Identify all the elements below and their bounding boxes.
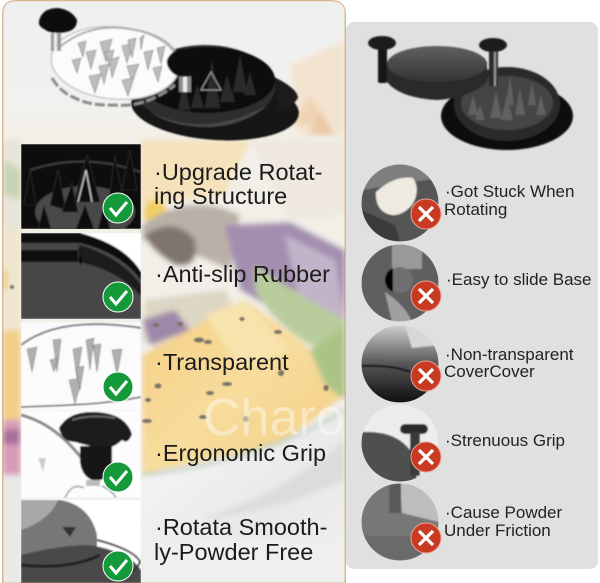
watermark: Charoo — [203, 389, 374, 447]
check badge: smooth rotation — [103, 551, 133, 581]
black base — [129, 45, 301, 146]
feature label: smooth rotation: ·Rotata Smooth- — [155, 514, 327, 540]
drawback label: strenuous grip: ·Strenuous Grip — [445, 431, 565, 450]
drawback label: cause powder: ·Cause Powder — [445, 503, 563, 522]
check badge: transparent — [103, 372, 133, 402]
seeds — [10, 285, 328, 423]
photo: stuck food — [361, 164, 439, 242]
cross badge: stuck food — [411, 199, 441, 229]
cross badge: non-transparent cover — [411, 361, 441, 391]
drawback label: easy to slide: ·Easy to slide Base — [446, 270, 592, 289]
feature label: smooth rotation: ly-Powder Free — [154, 539, 313, 565]
check badge: anti-slip rubber — [103, 282, 133, 312]
photo: sliding base — [361, 244, 439, 322]
drawback label: non-transparent: CoverCover — [444, 362, 535, 381]
thumbnail: ergonomic grip — [21, 411, 141, 498]
cross badge: powder friction — [411, 523, 441, 553]
thumbnail: transparent spikes — [21, 322, 141, 411]
feature label: rotating structure: ·Upgrade Rotat- — [154, 159, 322, 185]
photo: strenuous grip — [361, 404, 439, 483]
thumbnail: smooth rotation — [21, 500, 141, 583]
photo: non-transparent cover — [361, 325, 439, 403]
photo: powder friction — [361, 483, 439, 561]
drawback label: non-transparent: ·Non-transparent — [445, 345, 574, 364]
drawback label: stuck when rotating: ·Got Stuck When — [445, 182, 574, 201]
check badge: ergonomic grip — [103, 462, 133, 492]
drawback label: stuck when rotating: Rotating — [444, 200, 507, 219]
feature label: anti-slip rubber: ·Anti-slip Rubber — [155, 261, 330, 287]
feature label: rotating structure: ing Structure — [154, 183, 287, 209]
cross badge: strenuous grip — [411, 442, 441, 472]
illustration: dark grinder product — [368, 36, 573, 150]
thumbnail: rotating structure — [21, 144, 141, 238]
illustration: transparent lid over black base — [39, 8, 301, 146]
thumbnail: anti-slip rubber — [21, 233, 141, 319]
background: food photo — [3, 0, 345, 583]
feature label: ergonomic grip: ·Ergonomic Grip — [155, 440, 326, 466]
transparent lid — [48, 22, 182, 105]
panel: upgraded product features — [3, 0, 374, 583]
check badge: rotating structure — [103, 193, 133, 223]
cross badge: sliding base — [411, 281, 441, 311]
feature label: transparent: ·Transparent — [155, 349, 289, 375]
panel: common product drawbacks — [346, 22, 598, 569]
right knob — [167, 49, 207, 92]
drawback label: cause powder: Under Friction — [444, 521, 551, 540]
left knob — [39, 8, 77, 51]
